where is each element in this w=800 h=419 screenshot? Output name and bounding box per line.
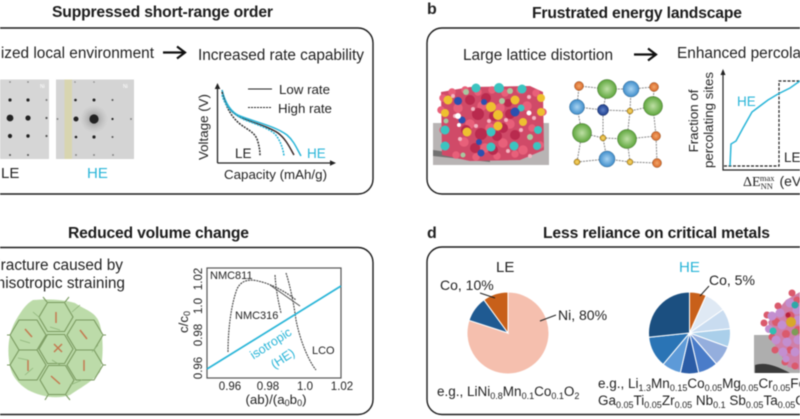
- axis label: capacity: Capacity (mAh/g): [224, 167, 327, 182]
- formula: LE example: 0.1: [522, 391, 534, 401]
- isotropic HE line: [207, 286, 341, 369]
- label: LCO: LCO: [312, 345, 335, 357]
- dashed strain curves: [228, 273, 316, 370]
- diffraction pattern HE: Ni: [123, 84, 128, 90]
- label: HE: HE: [737, 94, 756, 109]
- formula: LE example: Co: [534, 384, 551, 399]
- arrow: distortion to percolation: [634, 48, 656, 60]
- formula: HE example: Cr: [758, 376, 773, 391]
- formula: HE example: 0.05: [705, 383, 722, 393]
- chart: lattice strain: [176, 268, 353, 408]
- text: large lattice distortion: Large lattice distortion: [463, 47, 613, 64]
- formula: HE example: 0.05: [675, 400, 692, 410]
- label: NMC811: NMC811: [210, 270, 253, 282]
- heading: reduced volume change: Reduced volume change: [68, 225, 249, 242]
- label: LE diffraction: LE: [1, 165, 19, 182]
- formula: HE example: e.g., Li: [598, 376, 639, 391]
- formula: HE example: 0.05: [616, 400, 634, 410]
- axis label: c/c0: 0: [182, 311, 192, 316]
- formula: HE example: Mn: [651, 376, 670, 391]
- label: Co 5%: Co, 5%: [709, 272, 755, 288]
- formula: HE example: 0.05: [778, 400, 795, 410]
- curves: [222, 90, 301, 156]
- label: HE: HE: [679, 259, 700, 276]
- label: HE diffraction: HE: [87, 165, 108, 182]
- pie chart: LE composition: [467, 292, 549, 374]
- formula: HE example: 0.05: [644, 400, 662, 410]
- formula: HE example: 1.3: [639, 383, 651, 393]
- chart: voltage vs capacity: [196, 82, 336, 182]
- legend: High rate: [278, 101, 332, 116]
- y tick labels: 0.98: [193, 324, 205, 346]
- formula: HE example: 0.15: [670, 383, 687, 393]
- formula: HE example: Ti: [634, 393, 644, 408]
- formula: HE example: Zr: [662, 393, 675, 408]
- arrow: environment to rate capability: [163, 46, 185, 58]
- x tick labels: 0.98: [257, 381, 279, 393]
- y tick labels: 1.02: [193, 268, 205, 290]
- heading: frustrated energy landscape: Frustrated energy landscape: [532, 5, 742, 22]
- illustration: high-entropy crystal: [754, 290, 800, 373]
- illustration: distorted crystal: [433, 83, 549, 165]
- label: HE curve: HE: [307, 146, 326, 161]
- axis label: ab/a0b0: 0: [297, 398, 302, 408]
- chart axes: [218, 85, 334, 163]
- leader: Co LE: [480, 293, 495, 298]
- pie chart: HE composition: [648, 292, 731, 374]
- panel letter d: d: [427, 225, 437, 242]
- label: HE: (HE): [268, 346, 297, 372]
- axis label: c/c0: c/c: [176, 316, 191, 333]
- axis title line 2: percolating sites: [701, 72, 716, 168]
- formula: HE example: 0.1: [713, 400, 726, 410]
- formula: HE example: 0.05: [746, 400, 763, 410]
- panel frame c: [0, 248, 373, 414]
- formula: HE example: Sb: [726, 393, 746, 408]
- axis label: ab/a0b0: (ab)/(a: [245, 392, 285, 407]
- chart: fraction of percolating sites: [686, 69, 800, 191]
- panel frame d: [427, 247, 800, 414]
- heading: suppressed short-range order: Suppressed short-range order: [52, 4, 273, 21]
- legend: Low rate: [279, 82, 330, 97]
- diffraction pattern LE: [0, 80, 49, 159]
- heading: less reliance on critical metals: Less reliance on critical metals: [543, 225, 770, 242]
- formula: HE example: [598, 376, 800, 410]
- y tick labels: 0.96: [193, 357, 205, 379]
- label: LE: LE: [496, 259, 514, 276]
- label: Co 10%: Co, 10%: [440, 277, 494, 293]
- legend: [248, 82, 332, 116]
- HE curve: [730, 81, 800, 166]
- label: isotropic: isotropic: [247, 325, 294, 362]
- formula: LE example: O: [564, 384, 574, 399]
- y tick labels: [193, 268, 205, 379]
- x tick labels: [219, 381, 353, 393]
- formula: LE example: Mn: [503, 384, 522, 399]
- panel letter b: b: [427, 1, 437, 18]
- chart frame: [207, 268, 341, 378]
- axis label: delta E max NN: NN: [761, 181, 773, 191]
- formula: HE example: Mg: [722, 376, 741, 391]
- formula: HE example: Ta: [763, 393, 778, 408]
- label: Ni 80%: Ni, 80%: [558, 307, 607, 323]
- chart axes: [723, 72, 800, 170]
- x tick labels: 1.02: [331, 381, 353, 393]
- formula: HE example: Co: [687, 376, 705, 391]
- panel: frustrated energy landscape: [427, 1, 800, 194]
- formula: HE example: Ga: [598, 393, 616, 408]
- leader: Co HE: [700, 286, 709, 296]
- illustration: distorted lattice: [570, 80, 662, 168]
- text: increased rate capability: Increased rate capability: [198, 47, 364, 64]
- illustration: polycrystalline particle: [7, 297, 106, 400]
- x tick labels: 1.0: [297, 381, 313, 393]
- label: NMC316: NMC316: [235, 310, 278, 322]
- x tick labels: 0.96: [219, 381, 241, 393]
- panel: less reliance on critical metals: [427, 225, 800, 414]
- axis title line 1: Fraction of: [686, 89, 701, 152]
- diffraction pattern LE: Ni: [40, 84, 45, 90]
- formula: HE example: Nb: [692, 393, 713, 408]
- formula: HE example: 0.05: [741, 383, 758, 393]
- panel: reduced volume change: [0, 225, 373, 414]
- LE dashed curve: [724, 81, 800, 166]
- formula: LE example: e.g., LiNi: [437, 384, 490, 399]
- axis label: delta E max NN: ΔE: [743, 175, 761, 190]
- panel frame a: [0, 28, 373, 194]
- axis label: voltage: Voltage (V): [196, 94, 211, 160]
- y tick labels: 1.0: [193, 298, 205, 314]
- formula: HE example: 0.05: [773, 383, 790, 393]
- panel: suppressed short-range order: [0, 4, 373, 194]
- axis label: delta E max NN: max: [760, 173, 775, 183]
- formula: LE example: 0.8: [490, 391, 503, 401]
- formula: LE example: 0.1: [551, 391, 564, 401]
- axis label: ab/a0b0: 0: [285, 398, 290, 408]
- formula: LE example: 2: [574, 391, 579, 401]
- axis label: ab/a0b0: b: [290, 392, 297, 407]
- label: LE curve: LE: [235, 146, 252, 161]
- axis label: ab/a0b0: ): [302, 392, 307, 407]
- panel frame b: [427, 28, 800, 194]
- leader: Ni: [540, 315, 556, 321]
- diffraction pattern HE: [56, 80, 134, 159]
